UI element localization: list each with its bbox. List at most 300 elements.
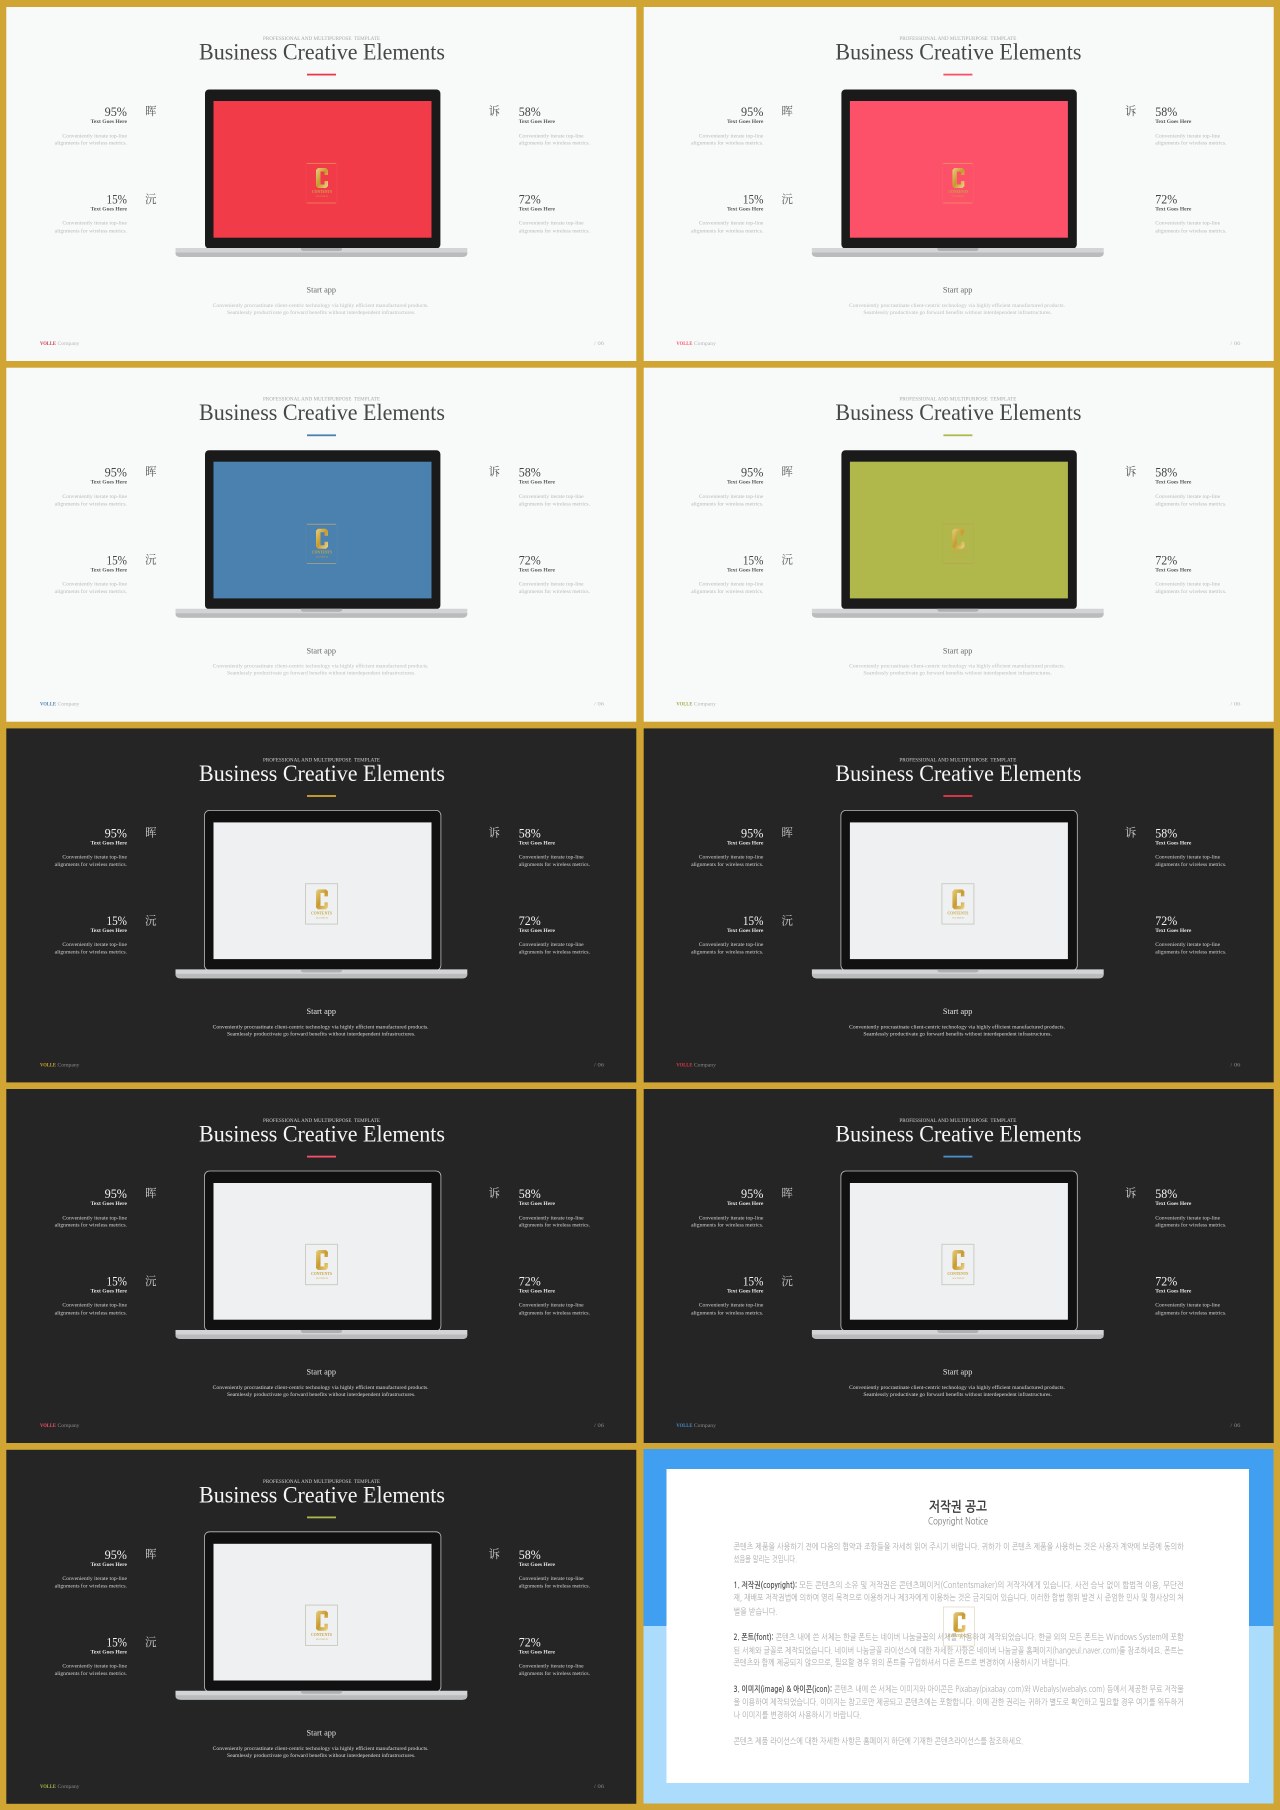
stat: 58%: Conveniently iterate top-line	[519, 1215, 584, 1221]
footer: Company	[58, 1784, 80, 1790]
description	[213, 1023, 429, 1037]
stat: 95%: 95%	[105, 104, 127, 119]
paragraph: copyright: 벌을 받습니다.	[734, 1606, 778, 1616]
laptop	[812, 810, 1104, 978]
stat: 15%: Conveniently iterate top-line	[62, 1303, 128, 1309]
description: Seamlessly productivate go forward benefits without interdependent infrastructures.	[863, 1391, 1052, 1398]
accent line	[307, 795, 336, 797]
panel: copyright notice	[644, 1449, 1274, 1804]
stat: 58%	[519, 1547, 590, 1590]
stat: 95%: Text Goes Here	[91, 841, 127, 846]
kicker: PROFESSIONAL AND MULTIPURPOSE TEMPLATE	[263, 1118, 381, 1124]
icon glyph: 晖	[781, 1187, 793, 1200]
stat: 72%: 72%	[519, 192, 541, 207]
description: Seamlessly productivate go forward benefits without interdependent infrastructures.	[227, 1752, 416, 1759]
title: Business Creative Elements	[199, 761, 445, 786]
stat: 72%: 72%	[1155, 913, 1177, 928]
kicker: PROFESSIONAL AND MULTIPURPOSE TEMPLATE	[263, 757, 381, 763]
paragraph: font	[734, 1632, 1184, 1668]
stat: 95%: Conveniently iterate top-line	[62, 133, 128, 139]
stat: 72%: Conveniently iterate top-line	[519, 1303, 584, 1309]
stat: 72%: 72%	[519, 913, 541, 928]
stat: 95%	[691, 1186, 764, 1229]
stat: 58%	[1155, 104, 1226, 147]
stat: 15%: Text Goes Here	[91, 1290, 127, 1295]
stat: 95%: Conveniently iterate top-line	[62, 1215, 128, 1221]
stat: 95%: 95%	[105, 1186, 127, 1201]
stat: 15%: Text Goes Here	[727, 208, 763, 213]
stat: 95%: Text Goes Here	[91, 481, 127, 486]
logo: REAL TEMPLATE	[316, 1638, 329, 1641]
stat: 58%	[1155, 465, 1226, 507]
footer: VOLLE	[676, 1062, 693, 1068]
icon glyph: 诉	[488, 1187, 500, 1200]
stat: 95%: Conveniently iterate top-line	[699, 133, 764, 139]
paragraph: copyright: 재, 재배포 저작권법에 의하여 영리 목적으로 이용하거나 제3자에게 이용하는 것은 금지되어 있습니다. 이러한 합법 행위 발견 시 준엄한 민사 및 형사상의 처	[734, 1593, 1184, 1603]
footer: / 06	[1230, 702, 1241, 708]
icon glyph: 沅	[145, 554, 157, 567]
stat: 58%	[1155, 1186, 1226, 1229]
footer: / 06	[1230, 341, 1241, 347]
icon glyph: 诉	[1125, 826, 1137, 839]
stat: 58%: Conveniently iterate top-line	[1155, 494, 1221, 500]
stat: 58%	[519, 104, 590, 147]
logo: REAL TEMPLATE	[952, 1277, 965, 1280]
stat: 72%: Conveniently iterate top-line	[1155, 1303, 1221, 1309]
stat: 95%: 95%	[105, 465, 127, 480]
icon glyph: 沅	[145, 914, 157, 927]
logo	[942, 524, 973, 564]
icon glyph: 沅	[781, 554, 793, 567]
paragraph: copyright	[734, 1580, 1184, 1616]
icon glyph: 沅	[145, 1275, 157, 1288]
description: Seamlessly productivate go forward benefits without interdependent infrastructures.	[227, 1030, 416, 1037]
heading: copyright notice Korean: 저작권 공고	[929, 1500, 987, 1515]
logo	[942, 884, 974, 924]
start app heading: Start app	[943, 1368, 972, 1377]
stat: 15%: Conveniently iterate top-line	[699, 942, 764, 948]
stat: 72%: alignments for wireless metrics.	[519, 949, 590, 956]
description: Conveniently procrastinate client-centric technology via highly efficient manufactured products.	[849, 663, 1065, 670]
stat: 15%: Text Goes Here	[91, 208, 127, 213]
description: Conveniently procrastinate client-centric technology via highly efficient manufactured products.	[849, 1384, 1065, 1391]
stat: 15%: Conveniently iterate top-line	[699, 1303, 764, 1309]
stat: 95%	[55, 104, 128, 147]
stat: 58%	[519, 825, 590, 868]
stat: 95%	[55, 1547, 128, 1590]
logo: CONTENTS	[311, 910, 333, 915]
footer: VOLLE	[40, 1062, 56, 1068]
description	[849, 663, 1065, 677]
accent line	[307, 1156, 336, 1158]
logo: REAL TEMPLATE	[316, 195, 329, 198]
stat: 72%: 72%	[1155, 552, 1177, 567]
icon glyph: 晖	[781, 105, 793, 118]
stat: 58%: alignments for wireless metrics.	[519, 140, 590, 147]
stat: 95%: Text Goes Here	[91, 120, 127, 125]
stat: 95%: Conveniently iterate top-line	[62, 855, 128, 861]
stat: 72%: Conveniently iterate top-line	[519, 942, 584, 948]
stat: 15%: 15%	[106, 1274, 127, 1289]
stat: 95%: alignments for wireless metrics.	[55, 861, 127, 868]
logo	[942, 163, 973, 203]
stat: 58%: 58%	[519, 1547, 541, 1562]
start app heading: Start app	[306, 286, 336, 295]
logo: CONTENTS	[948, 550, 969, 555]
title: Business Creative Elements	[835, 1122, 1081, 1146]
logo: REAL TEMPLATE	[952, 916, 965, 919]
stat: 72%: alignments for wireless metrics.	[519, 1670, 590, 1677]
footer: VOLLE	[676, 1423, 693, 1429]
stat: 58%	[1155, 825, 1226, 868]
start app heading: Start app	[306, 1368, 336, 1377]
logo	[306, 884, 338, 924]
kicker: PROFESSIONAL AND MULTIPURPOSE TEMPLATE	[899, 397, 1017, 403]
stat: 58%: Conveniently iterate top-line	[519, 494, 584, 500]
stat: 15%: alignments for wireless metrics.	[55, 588, 127, 595]
laptop	[176, 450, 467, 618]
stat: 15%: Text Goes Here	[727, 929, 763, 934]
icon glyph: 晖	[781, 826, 793, 839]
stat: 72%: Conveniently iterate top-line	[1155, 942, 1221, 948]
stat: 58%: 58%	[519, 104, 541, 119]
stat: 58%: Conveniently iterate top-line	[519, 855, 584, 861]
paragraph: copyright: 1. 저작권(copyright):	[734, 1580, 797, 1590]
footer: VOLLE	[40, 341, 56, 347]
stat: 72%: alignments for wireless metrics.	[1155, 1309, 1226, 1316]
stat: 15%: alignments for wireless metrics.	[691, 1309, 763, 1316]
paragraph: font: 콘텐츠와 함께 제공되지 않으므로, 필요할 경우 위의 폰트를 구입하셔서 다른 폰트로 변경하여 사용하시기 바랍니다.	[734, 1658, 1070, 1668]
stat: 15%: Conveniently iterate top-line	[62, 942, 128, 948]
paragraph: image and icon: 콘텐츠 내에 쓴 서체는 이미지와 아이콘은 Pixabay(pixabay.com)와 Webalys(webalys.com) 등에서 제공한 무료 저작물	[834, 1684, 1184, 1694]
title: Business Creative Elements	[199, 1482, 445, 1507]
stat: 72%: Conveniently iterate top-line	[519, 1664, 584, 1670]
description: Seamlessly productivate go forward benefits without interdependent infrastructures.	[863, 1030, 1052, 1037]
panel: light olive slide	[644, 368, 1274, 722]
footer: Company	[58, 341, 80, 347]
panel: dark gold slide	[6, 728, 636, 1082]
start app heading: Start app	[943, 286, 972, 295]
stat: 95%	[691, 465, 764, 507]
stat: 72%: Text Goes Here	[1155, 208, 1191, 213]
heading: copyright notice English: Copyright Notice	[928, 1518, 988, 1527]
footer: Company	[58, 1062, 80, 1068]
footer: Company	[694, 702, 716, 708]
footer: VOLLE	[676, 702, 693, 708]
stat: 58%: Text Goes Here	[1155, 841, 1191, 846]
description	[213, 302, 429, 316]
kicker: PROFESSIONAL AND MULTIPURPOSE TEMPLATE	[899, 757, 1017, 763]
footer: / 06	[594, 1062, 604, 1068]
footer: Company	[694, 341, 716, 347]
stat: 58%: Text Goes Here	[519, 481, 555, 486]
logo	[306, 524, 337, 564]
icon glyph: 诉	[488, 1548, 500, 1561]
stat: 72%: alignments for wireless metrics.	[519, 588, 590, 595]
stat: 15%: alignments for wireless metrics.	[55, 1670, 127, 1677]
description: Seamlessly productivate go forward benefits without interdependent infrastructures.	[227, 309, 416, 316]
description: Conveniently procrastinate client-centric technology via highly efficient manufactured products.	[213, 1745, 429, 1752]
footer	[676, 1423, 1241, 1429]
stat: 15%: Text Goes Here	[91, 1651, 127, 1656]
accent line	[943, 74, 972, 76]
stat: 72%: Text Goes Here	[519, 208, 555, 213]
stat: 58%	[519, 1186, 590, 1229]
icon glyph: 诉	[488, 105, 500, 118]
stat: 72%	[519, 1634, 590, 1677]
start app heading: Start app	[943, 646, 972, 655]
footer: Company	[694, 1062, 716, 1068]
title: Business Creative Elements	[199, 400, 445, 425]
start app heading: Start app	[306, 646, 336, 655]
stat: 95%	[55, 465, 128, 507]
logo: CONTENTS	[948, 1633, 970, 1638]
stat: 72%	[519, 192, 590, 234]
stat: 72%	[519, 913, 590, 956]
paragraph: copyright: 모든 콘텐츠의 소유 및 저작권은 콘텐츠메이커(Contentsmaker)의 저작자에게 있습니다. 사전 승낙 없이 합법적 이용, 무단전	[799, 1580, 1184, 1590]
footer: / 06	[594, 1784, 604, 1790]
stat: 95%: 95%	[741, 104, 764, 119]
logo	[306, 1244, 338, 1285]
description: Conveniently procrastinate client-centric technology via highly efficient manufactured products.	[849, 1023, 1065, 1030]
panel: dark olive slide	[6, 1450, 636, 1804]
paragraph: intro: 셨음을 알리는 것입니다.	[734, 1554, 797, 1564]
stat: 58%: Text Goes Here	[1155, 1202, 1191, 1207]
stat: 58%: Conveniently iterate top-line	[519, 133, 584, 139]
stat: 58%: Text Goes Here	[519, 1563, 555, 1568]
description	[849, 1023, 1065, 1037]
stat: 15%: 15%	[106, 192, 127, 207]
description: Conveniently procrastinate client-centric technology via highly efficient manufactured products.	[213, 663, 429, 670]
laptop	[812, 90, 1104, 257]
stat: 58%: 58%	[1155, 1186, 1177, 1201]
stat: 95%: alignments for wireless metrics.	[55, 140, 127, 147]
stat: 58%: 58%	[1155, 104, 1177, 119]
laptop	[176, 90, 467, 257]
stat: 72%: 72%	[1155, 192, 1177, 207]
description: Seamlessly productivate go forward benefits without interdependent infrastructures.	[227, 1391, 416, 1398]
stat: 72%	[519, 552, 590, 595]
stat: 15%: alignments for wireless metrics.	[55, 227, 127, 234]
footer	[40, 1062, 604, 1068]
footer: VOLLE	[40, 702, 56, 708]
paragraph: image and icon: 나 이미지를 변경하여 사용하시기 바랍니다.	[734, 1710, 862, 1720]
stat: 72%: 72%	[1155, 1274, 1177, 1289]
stat: 72%: Conveniently iterate top-line	[519, 221, 584, 227]
description: Conveniently procrastinate client-centric technology via highly efficient manufactured products.	[213, 1023, 429, 1030]
laptop	[176, 1532, 467, 1700]
stat: 58%: 58%	[1155, 825, 1177, 840]
stat: 95%: Text Goes Here	[91, 1563, 127, 1568]
panel: dark red slide	[644, 728, 1274, 1082]
stat: 58%: Text Goes Here	[1155, 120, 1191, 125]
stat: 72%: Text Goes Here	[1155, 929, 1191, 934]
stat: 95%	[55, 825, 128, 868]
logo: CONTENTS	[312, 189, 333, 194]
description	[849, 1384, 1065, 1398]
panel: dark pink slide	[6, 1089, 636, 1443]
stat: 58%: alignments for wireless metrics.	[519, 500, 590, 507]
stat: 95%: 95%	[741, 1186, 764, 1201]
footer	[40, 1784, 604, 1790]
stat: 15%: Conveniently iterate top-line	[699, 581, 764, 587]
stat: 58%: alignments for wireless metrics.	[519, 861, 590, 868]
stat: 72%	[1155, 913, 1226, 956]
stat: 58%: alignments for wireless metrics.	[1155, 1222, 1226, 1229]
footer: VOLLE	[676, 341, 693, 347]
start app heading: Start app	[306, 1729, 336, 1738]
stat: 58%: 58%	[519, 1186, 541, 1201]
stat: 95%: Conveniently iterate top-line	[699, 855, 764, 861]
stat: 95%: alignments for wireless metrics.	[691, 861, 763, 868]
stat: 15%: 15%	[743, 192, 764, 207]
stat: 15%: Text Goes Here	[91, 929, 127, 934]
footer: Company	[58, 702, 80, 708]
paragraph: font: 콘텐츠 내에 쓴 서체는 한글 폰트는 네이버 나눔글꼴의 서체를 사용하여 제작되었습니다. 한글 외의 모든 폰트는 Windows System에 포함	[776, 1632, 1184, 1642]
kicker: PROFESSIONAL AND MULTIPURPOSE TEMPLATE	[263, 36, 381, 42]
paragraph: image and icon: 3. 이미지(image) & 아이콘(icon):	[734, 1684, 832, 1694]
footer	[676, 341, 1241, 347]
stat: 15%	[691, 913, 764, 956]
icon glyph: 诉	[1125, 466, 1137, 479]
stat: 15%	[691, 192, 764, 234]
logo: CONTENTS	[311, 1632, 333, 1637]
title: Business Creative Elements	[835, 761, 1081, 786]
stat: 72%	[1155, 192, 1226, 234]
footer: / 06	[1230, 1062, 1241, 1068]
logo: REAL TEMPLATE	[952, 195, 965, 198]
laptop	[176, 810, 467, 978]
icon glyph: 晖	[145, 826, 157, 839]
footer: VOLLE	[40, 1784, 56, 1790]
logo	[943, 1607, 974, 1646]
stat: 72%: 72%	[519, 1274, 541, 1289]
paragraph: font: 2. 폰트(font):	[734, 1632, 774, 1642]
stat: 15%	[691, 1274, 764, 1316]
stat: 15%: alignments for wireless metrics.	[691, 949, 763, 956]
description: Seamlessly productivate go forward benefits without interdependent infrastructures.	[863, 309, 1052, 316]
stat: 72%: alignments for wireless metrics.	[1155, 949, 1226, 956]
stat: 58%: alignments for wireless metrics.	[519, 1583, 590, 1590]
stat: 15%	[691, 552, 764, 595]
icon glyph: 晖	[145, 1187, 157, 1200]
kicker: PROFESSIONAL AND MULTIPURPOSE TEMPLATE	[899, 36, 1017, 42]
white card	[666, 1469, 1249, 1783]
accent line	[943, 434, 972, 436]
stat: 72%: Text Goes Here	[519, 568, 555, 573]
stat: 58%	[519, 465, 590, 507]
description: Seamlessly productivate go forward benefits without interdependent infrastructures.	[227, 670, 416, 677]
stat: 95%: alignments for wireless metrics.	[691, 1222, 763, 1229]
stat: 72%: Conveniently iterate top-line	[519, 581, 584, 587]
icon glyph: 诉	[1125, 1187, 1137, 1200]
stat: 95%: Text Goes Here	[727, 481, 763, 486]
description: Conveniently procrastinate client-centric technology via highly efficient manufactured products.	[849, 302, 1065, 309]
title: Business Creative Elements	[835, 400, 1081, 425]
stat: 72%	[1155, 552, 1226, 595]
kicker: PROFESSIONAL AND MULTIPURPOSE TEMPLATE	[899, 1118, 1017, 1124]
stat: 95%: 95%	[741, 825, 764, 840]
stat: 15%	[55, 192, 128, 234]
stat: 72%: 72%	[519, 1635, 541, 1650]
stat: 58%: alignments for wireless metrics.	[1155, 500, 1226, 507]
description	[213, 1384, 429, 1398]
footer: / 06	[594, 702, 604, 708]
logo	[306, 163, 337, 203]
stat: 58%: Text Goes Here	[519, 1202, 555, 1207]
stat: 15%: alignments for wireless metrics.	[55, 1309, 127, 1316]
stat: 72%: alignments for wireless metrics.	[519, 1309, 590, 1316]
stat: 15%: 15%	[743, 913, 764, 928]
stat: 58%: Text Goes Here	[519, 120, 555, 125]
stat: 58%: Text Goes Here	[1155, 481, 1191, 486]
stat: 15%	[55, 913, 128, 956]
stat: 95%: Text Goes Here	[727, 1202, 763, 1207]
paragraph: intro	[734, 1541, 1184, 1564]
paragraph: license note: 콘텐츠 제품 라이선스에 대한 자세한 사항은 홈페이지 하단에 기재한 콘텐츠라이선스를 참조하세요.	[734, 1736, 1024, 1746]
description	[213, 663, 429, 677]
stat: 95%: alignments for wireless metrics.	[55, 500, 127, 507]
stat: 72%	[519, 1274, 590, 1316]
icon glyph: 诉	[1125, 105, 1137, 118]
stat: 15%: alignments for wireless metrics.	[691, 588, 763, 595]
kicker: PROFESSIONAL AND MULTIPURPOSE TEMPLATE	[263, 1479, 381, 1485]
logo: CONTENTS	[312, 550, 333, 555]
paragraph: intro: 콘텐츠 제품을 사용하기 전에 다음의 협약과 조항들을 자세히 읽어 주시기 바랍니다. 귀하가 이 콘텐츠 제품을 사용하는 것은 사용자 계약에 보증에 동의하	[734, 1541, 1184, 1551]
stat: 95%: Text Goes Here	[727, 120, 763, 125]
stat: 15%: Text Goes Here	[727, 1290, 763, 1295]
stat: 15%	[55, 1274, 128, 1316]
accent line	[943, 795, 972, 797]
stat: 58%: alignments for wireless metrics.	[1155, 861, 1226, 868]
stat: 15%: 15%	[743, 1274, 764, 1289]
stat: 95%: Conveniently iterate top-line	[699, 494, 764, 500]
description: Seamlessly productivate go forward benefits without interdependent infrastructures.	[863, 670, 1052, 677]
stat: 95%: 95%	[105, 1547, 127, 1562]
stat: 15%: Conveniently iterate top-line	[62, 221, 128, 227]
stat: 15%: Conveniently iterate top-line	[62, 581, 128, 587]
footer	[40, 702, 604, 708]
stat: 72%: Text Goes Here	[1155, 1290, 1191, 1295]
stat: 15%: 15%	[743, 552, 764, 567]
description: Conveniently procrastinate client-centric technology via highly efficient manufactured products.	[213, 302, 429, 309]
stat: 58%: Text Goes Here	[519, 841, 555, 846]
stat: 95%: Conveniently iterate top-line	[699, 1215, 764, 1221]
stat: 15%	[55, 552, 128, 595]
footer	[676, 1062, 1241, 1068]
logo: REAL TEMPLATE	[316, 556, 329, 559]
icon glyph: 沅	[781, 193, 793, 206]
icon glyph: 诉	[488, 826, 500, 839]
stat: 72%: 72%	[519, 552, 541, 567]
stat: 15%: 15%	[106, 552, 127, 567]
panel: light blue slide	[6, 368, 636, 722]
stat: 95%: 95%	[741, 465, 764, 480]
stat: 15%	[55, 1634, 128, 1677]
stat: 58%: alignments for wireless metrics.	[519, 1222, 590, 1229]
stat: 72%: Text Goes Here	[519, 1290, 555, 1295]
stat: 95%: Text Goes Here	[727, 841, 763, 846]
start app heading: Start app	[943, 1007, 972, 1016]
footer	[40, 341, 604, 347]
logo: CONTENTS	[947, 910, 969, 915]
paragraph: image and icon: 을 이용하여 제작되었습니다. 이미지는 참고로만 제공되고 콘텐츠에는 포함합니다. 이에 관한 권리는 귀하가 별도로 확인하고 필요할 경우 여기를 위두하거	[734, 1697, 1184, 1707]
accent line	[307, 434, 336, 436]
stat: 95%: alignments for wireless metrics.	[691, 140, 763, 147]
stat: 58%: Conveniently iterate top-line	[1155, 133, 1221, 139]
paragraph: image and icon	[734, 1684, 1184, 1720]
stat: 72%: Text Goes Here	[519, 1651, 555, 1656]
